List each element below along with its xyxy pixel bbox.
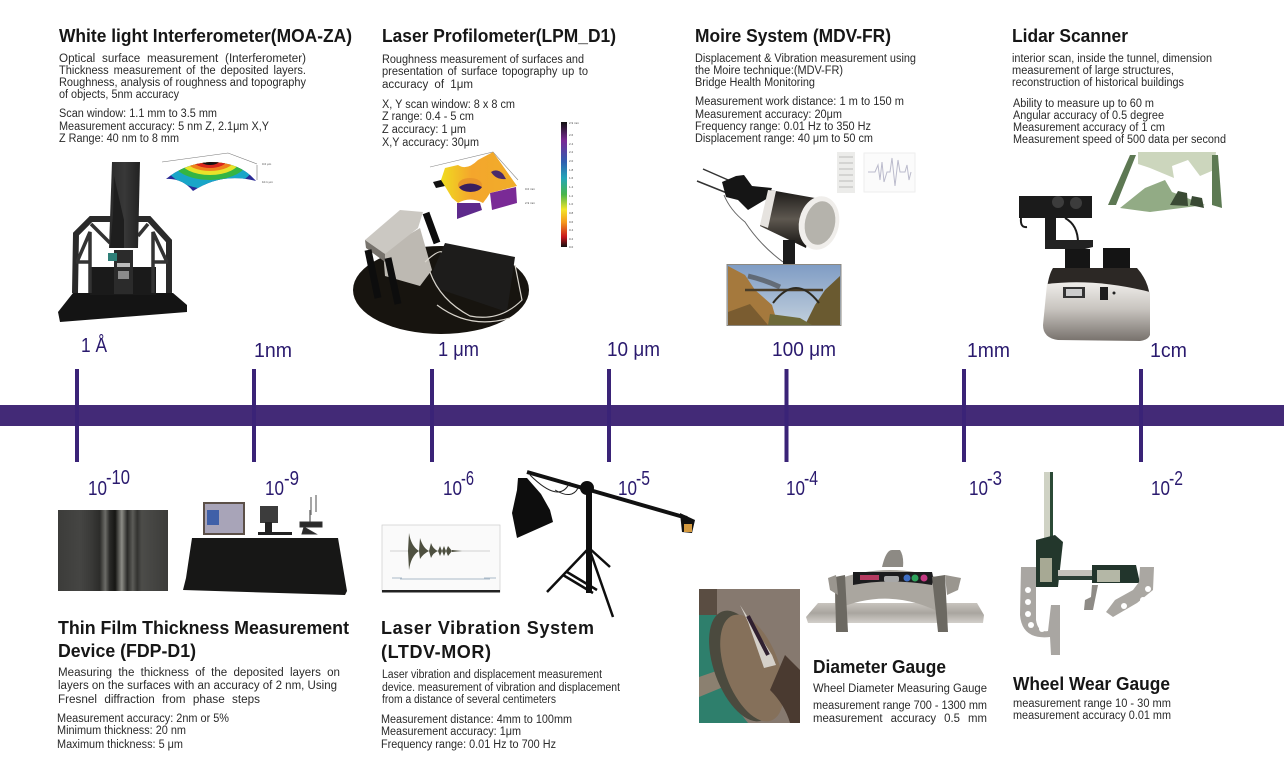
scale labels above axis: 100 μm <box>772 339 836 361</box>
color bar: 0.4 <box>569 228 574 232</box>
specifications: Measurement accuracy: 20μm <box>695 109 842 121</box>
result screenshots <box>837 152 915 193</box>
description: reconstruction of historical buildings <box>1012 77 1184 89</box>
vibration chart screenshot <box>382 525 500 592</box>
specifications <box>382 99 515 149</box>
powers of ten labels below axis <box>88 467 1183 500</box>
heading: Laser Profilometer(LPM_D1) <box>382 26 616 46</box>
specifications <box>1013 698 1171 722</box>
specifications: Frequency range: 0.01 Hz to 700 Hz <box>381 739 556 751</box>
panel: Thin Film Thickness Measurement Device <box>57 495 349 751</box>
wheel wear gauge device <box>1020 472 1154 655</box>
specifications: Frequency range: 0.01 Hz to 350 Hz <box>695 121 871 133</box>
description <box>695 53 916 89</box>
powers of ten labels below axis: -5 <box>636 468 650 490</box>
wheel photo <box>696 589 800 730</box>
specifications: Measurement distance: 4mm to 100mm <box>381 714 572 726</box>
thin film device <box>183 495 347 595</box>
description: device. measurement of vibration and displacement <box>382 682 621 694</box>
heading: Thin Film Thickness Measurement <box>58 618 349 638</box>
specifications: Displacement range: 40 μm to 50 cm <box>695 133 873 145</box>
scale labels above axis: 10 μm <box>607 339 660 361</box>
scale labels above axis: 1 μm <box>438 339 479 361</box>
scale labels above axis: 1cm <box>1150 340 1187 362</box>
panel: Laser Profilometer <box>353 26 616 334</box>
surface map: 10.1 μm <box>262 180 273 184</box>
fringe pattern image <box>58 510 168 591</box>
panel: White light Interferometer <box>58 26 352 322</box>
specifications <box>381 714 572 751</box>
specifications <box>695 96 904 145</box>
point cloud <box>1108 152 1222 212</box>
topography part <box>430 152 536 219</box>
powers of ten labels below axis: -4 <box>804 468 818 490</box>
color bar: 2.2 <box>569 150 574 154</box>
color bar: 2.6 <box>569 133 574 137</box>
lidar scanner device <box>1019 196 1150 341</box>
interferometer device <box>58 162 187 322</box>
specifications: Z accuracy: 1 μm <box>382 124 466 136</box>
heading: Wheel Wear Gauge <box>1013 674 1170 694</box>
powers of ten labels below axis: 10 <box>443 478 462 500</box>
description: accuracy of 1μm <box>382 79 473 91</box>
specifications <box>1013 98 1226 146</box>
specifications: X, Y scan window: 8 x 8 cm <box>382 99 515 111</box>
description: from a distance of several centimeters <box>382 694 556 706</box>
heading: Diameter Gauge <box>813 657 946 677</box>
topography part: 2.9 mm <box>525 201 536 205</box>
specifications: Z Range: 40 nm to 8 mm <box>59 133 179 145</box>
powers of ten labels below axis: -2 <box>1169 468 1183 490</box>
color bar: 1.2 <box>569 194 574 198</box>
moire telescope <box>697 169 844 264</box>
description <box>1012 53 1212 89</box>
bridge photo <box>727 264 841 326</box>
specifications: Measurement work distance: 1 m to 150 m <box>695 96 904 108</box>
description: Optical surface measurement (Interferometer) <box>59 53 306 65</box>
color bar: 1.8 <box>569 168 574 172</box>
powers of ten labels below axis: 10 <box>1151 478 1170 500</box>
specifications <box>813 700 987 725</box>
heading: (LTDV-MOR) <box>381 642 491 662</box>
description: Bridge Health Monitoring <box>695 77 815 89</box>
description: Wheel Diameter Measuring Gauge <box>813 683 987 695</box>
powers of ten labels below axis: -10 <box>106 467 130 489</box>
description: Displacement & Vibration measurement using <box>695 53 916 65</box>
specifications: measurement accuracy 0.01 mm <box>1013 710 1171 722</box>
description <box>59 53 306 101</box>
description <box>382 54 588 91</box>
color bar: 1.0 <box>569 202 574 206</box>
description: Roughness measurement of surfaces and <box>382 54 584 66</box>
description: Thickness measurement of the deposited layers. <box>59 65 306 77</box>
panel: Laser Vibration System <box>381 472 695 751</box>
powers of ten labels below axis: -9 <box>284 468 299 490</box>
color bar: 2.9 mm <box>569 121 580 125</box>
scale labels above axis: 1mm <box>967 340 1010 362</box>
powers of ten labels below axis: 10 <box>88 478 107 500</box>
panel: Lidar Scanner <box>1012 26 1226 341</box>
description: Laser vibration and displacement measurement <box>382 669 603 681</box>
specifications: Minimum thickness: 20 nm <box>57 725 186 737</box>
specifications: Angular accuracy of 0.5 degree <box>1013 110 1164 122</box>
panel: Wheel Wear Gauge <box>1013 472 1171 722</box>
specifications: measurement range 700 - 1300 mm <box>813 700 987 712</box>
powers of ten labels below axis: -6 <box>461 468 474 490</box>
color bar: 2.0 <box>569 159 574 163</box>
color bar: 0.8 <box>569 211 574 215</box>
powers of ten labels below axis: -3 <box>987 468 1002 490</box>
description <box>58 667 340 706</box>
heading: Laser Vibration System <box>381 618 594 638</box>
color bar: 2.4 <box>569 142 574 146</box>
specifications: Measurement accuracy: 2nm or 5% <box>57 713 229 725</box>
diameter gauge device <box>806 550 984 632</box>
heading <box>381 618 594 662</box>
description: measurement of large structures, <box>1012 65 1174 77</box>
surface map <box>162 152 273 191</box>
powers of ten labels below axis: 10 <box>969 478 988 500</box>
specifications: Measurement accuracy: 5 nm Z, 2.1μm X,Y <box>59 121 269 133</box>
description: Roughness, analysis of roughness and topography <box>59 77 306 89</box>
scale labels above axis: 1nm <box>254 340 292 362</box>
description: the Moire technique:(MDV-FR) <box>695 65 843 77</box>
heading: Moire System (MDV-FR) <box>695 26 891 46</box>
specifications <box>59 108 269 145</box>
specifications: Ability to measure up to 60 m <box>1013 98 1154 110</box>
topography part: 0.0 mm <box>525 187 536 191</box>
description: Measuring the thickness of the deposited layers on <box>58 667 340 679</box>
powers of ten labels below axis: 10 <box>786 478 805 500</box>
panel: Moire System <box>695 26 916 326</box>
description <box>382 669 621 706</box>
color bar <box>561 121 580 249</box>
specifications: measurement accuracy 0.5 mm <box>813 713 987 725</box>
profilometer device <box>353 210 529 334</box>
heading <box>58 618 349 661</box>
color bar: 1.4 <box>569 185 574 189</box>
color bar: 0.6 <box>569 220 574 224</box>
color bar: 1.6 <box>569 176 574 180</box>
description: of objects, 5nm accuracy <box>59 89 179 101</box>
powers of ten labels below axis: 10 <box>618 478 637 500</box>
specifications: Z range: 0.4 - 5 cm <box>382 111 474 123</box>
heading: Lidar Scanner <box>1012 26 1128 46</box>
specifications <box>57 713 229 751</box>
specifications: Measurement speed of 500 data per second <box>1013 134 1226 146</box>
powers of ten labels below axis: 10 <box>265 478 284 500</box>
specifications: Measurement accuracy: 1μm <box>381 726 521 738</box>
scale labels above axis <box>81 334 1187 362</box>
timeline scale axis <box>0 369 1284 462</box>
specifications: Maximum thickness: 5 μm <box>57 739 183 751</box>
scale labels above axis: 1 Å <box>81 334 108 357</box>
laser vibrometer on boom stand <box>512 472 695 617</box>
color bar: 0.0 <box>569 245 574 249</box>
description: interior scan, inside the tunnel, dimension <box>1012 53 1212 65</box>
surface map: 0.0 μm <box>262 162 272 166</box>
heading: Device (FDP-D1) <box>58 641 196 661</box>
description: presentation of surface topography up to <box>382 66 588 78</box>
panel: Diameter Gauge <box>696 550 987 730</box>
description: Fresnel diffraction from phase steps <box>58 694 260 706</box>
heading: White light Interferometer(MOA-ZA) <box>59 26 352 46</box>
specifications: X,Y accuracy: 30μm <box>382 137 479 149</box>
specifications: measurement range 10 - 30 mm <box>1013 698 1171 710</box>
specifications: Measurement accuracy of 1 cm <box>1013 122 1165 134</box>
color bar: 0.2 <box>569 237 574 241</box>
description: layers on the surfaces with an accuracy of 2 nm, Using <box>58 680 337 692</box>
specifications: Scan window: 1.1 mm to 3.5 mm <box>59 108 217 120</box>
